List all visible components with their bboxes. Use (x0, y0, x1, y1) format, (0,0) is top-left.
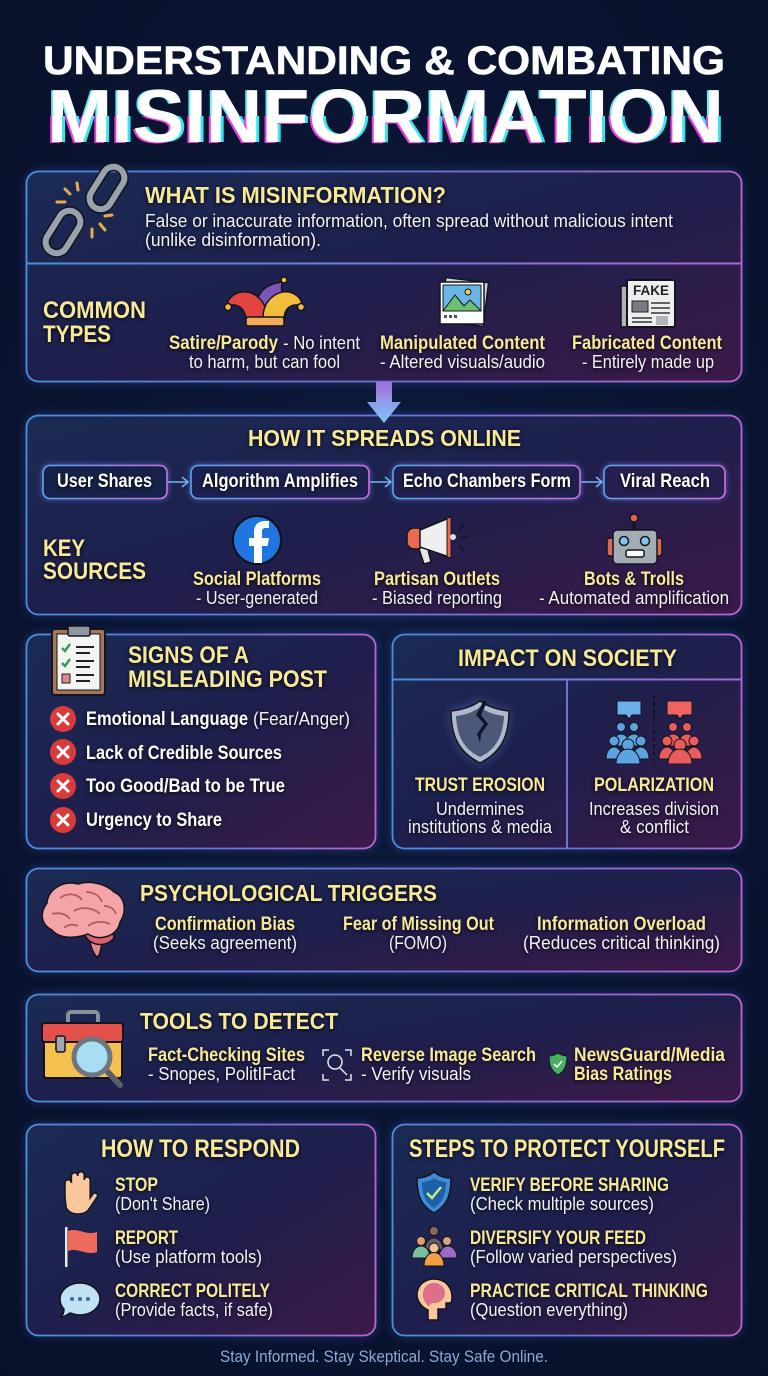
heading: HOW TO RESPOND (101, 1135, 300, 1163)
stop text: STOP (115, 1175, 158, 1196)
heading: IMPACT ON SOCIETY (458, 645, 677, 672)
trust erosion text (408, 775, 553, 837)
flow step: algorithm (191, 466, 369, 498)
key sources label: KEY (43, 535, 85, 562)
tool: newsguard: Bias Ratings (574, 1064, 672, 1085)
title line 2: glitch word: MISINFORMATION (48, 74, 724, 158)
trigger: confirmation bias: Confirmation Bias (155, 914, 295, 935)
sign: urgency (50, 807, 222, 833)
icon: cracked shield (451, 700, 509, 763)
manipulated text: - Altered visuals/audio (380, 351, 545, 372)
partisan text: Partisan Outlets (374, 569, 500, 590)
icon: facebook (233, 516, 281, 564)
tool: reverse image (361, 1045, 536, 1084)
diversify text (470, 1228, 677, 1267)
key sources label: SOURCES (43, 558, 146, 585)
tool: newsguard (574, 1045, 725, 1085)
icon: diverse group (412, 1226, 457, 1266)
bots text (539, 569, 729, 608)
key sources label (43, 535, 146, 585)
sign: too good: Too Good/Bad to be True (86, 776, 285, 797)
flow step: user shares: User Shares (57, 471, 152, 492)
panel: impact on society (392, 634, 742, 848)
social platforms text: Social Platforms (193, 569, 321, 590)
tool: newsguard: NewsGuard/Media (574, 1045, 725, 1066)
definition text: False or inaccurate information, often spread without malicious intent (145, 210, 673, 231)
correct text: (Provide facts, if safe) (115, 1299, 273, 1320)
diversify text: DIVERSIFY YOUR FEED (470, 1228, 646, 1249)
heading: TOOLS TO DETECT (140, 1008, 338, 1034)
practice text (470, 1281, 708, 1320)
polarization text (589, 775, 719, 837)
tool: fact checking (148, 1045, 305, 1084)
sign: urgency: Urgency to Share (86, 810, 222, 831)
flow step: echo chambers (393, 466, 580, 498)
title line 2: glitch word: MISINFORMATION (45, 75, 721, 159)
sign: too good (50, 773, 285, 799)
trigger: information overload: (Reduces critical thinking) (523, 932, 720, 953)
sign: lack of credible sources (50, 739, 282, 765)
panel: tools to detect (26, 994, 742, 1102)
icon: head with brain (417, 1279, 452, 1320)
satire text: Satire/Parody (169, 333, 278, 354)
heading: HOW IT SPREADS ONLINE (248, 425, 521, 451)
verify text: (Check multiple sources) (470, 1193, 654, 1214)
bots text: Bots & Trolls (584, 569, 684, 590)
trigger: information overload: Information Overload (537, 914, 706, 935)
manipulated text: Manipulated Content (380, 333, 546, 354)
report text: (Use platform tools) (115, 1246, 262, 1267)
diversify text: (Follow varied perspectives) (470, 1246, 677, 1267)
trigger: fomo: (FOMO) (389, 932, 447, 953)
flow step: viral reach (604, 466, 725, 498)
icon: photo stack (440, 277, 489, 326)
definition text: (unlike disinformation). (145, 229, 321, 250)
icon: blue shield (417, 1172, 451, 1213)
footer tagline: Stay Informed. Stay Skeptical. Stay Safe Online. (220, 1348, 548, 1366)
satire text: - No intent (283, 332, 360, 353)
sign: emotional language (50, 706, 350, 732)
verify text: VERIFY BEFORE SHARING (470, 1175, 669, 1196)
sign: emotional language: Emotional Language (86, 709, 248, 730)
icon: reverse image search (323, 1050, 351, 1080)
trigger: confirmation bias (153, 914, 297, 953)
practice text: PRACTICE CRITICAL THINKING (470, 1281, 708, 1302)
tool: reverse image: - Verify visuals (361, 1063, 471, 1084)
icon: toolbox with magnifier (42, 1012, 123, 1085)
common types label: COMMON (43, 297, 146, 324)
social platforms text: - User-generated (196, 587, 318, 608)
panel: how it spreads (26, 416, 742, 614)
common types label (43, 297, 146, 348)
heading: MISLEADING POST (128, 666, 327, 693)
common types label: TYPES (43, 321, 111, 348)
stop text (115, 1175, 210, 1214)
icon: red flag (65, 1227, 97, 1267)
flow step: algorithm: Algorithm Amplifies (202, 471, 358, 492)
polarization text: & conflict (620, 816, 689, 837)
panel: what is misinformation (26, 163, 742, 382)
practice text: (Question everything) (470, 1299, 628, 1320)
report text: REPORT (115, 1228, 178, 1249)
panel: how to respond (26, 1124, 376, 1336)
icon: fake newspaper: FAKE (633, 282, 669, 298)
icon: jester hat (224, 277, 304, 326)
fabricated text (572, 333, 723, 372)
trigger: information overload (523, 914, 720, 953)
panel: signs of a misleading post (26, 626, 376, 848)
tool: fact checking: Fact-Checking Sites (148, 1045, 305, 1066)
correct text (115, 1281, 273, 1320)
icon: fake newspaper (621, 280, 675, 327)
arrow: down between panels (367, 382, 401, 423)
trigger: fomo (343, 914, 495, 953)
flow step: user shares (43, 466, 167, 498)
arrow (168, 477, 188, 487)
fabricated text: Fabricated Content (572, 333, 723, 354)
trust erosion text: Undermines (436, 798, 524, 819)
tool: fact checking: - Snopes, PolitIFact (148, 1063, 295, 1084)
verify text (470, 1175, 669, 1214)
sign: emotional language: (Fear/Anger) (253, 708, 350, 729)
icon: brain (42, 882, 124, 957)
partisan text: - Biased reporting (372, 587, 502, 608)
arrow (581, 477, 602, 487)
report text (115, 1228, 262, 1267)
sign: lack of credible sources: Lack of Credible Sources (86, 743, 282, 764)
tool: reverse image: Reverse Image Search (361, 1045, 536, 1066)
icon: megaphone (407, 517, 468, 564)
flow step: echo chambers: Echo Chambers Form (403, 471, 571, 492)
satire text (169, 332, 360, 372)
title line 2: glitch word (50, 89, 721, 144)
satire text: to harm, but can fool (189, 351, 340, 372)
panel: psychological triggers (26, 868, 742, 972)
correct text: CORRECT POLITELY (115, 1281, 270, 1302)
polarization text: Increases division (589, 798, 719, 819)
flow step: viral reach: Viral Reach (620, 471, 710, 492)
stop text: (Don't Share) (115, 1193, 210, 1214)
trigger: confirmation bias: (Seeks agreement) (153, 932, 297, 953)
partisan text (372, 569, 502, 608)
polarization text: POLARIZATION (594, 775, 714, 796)
icon: broken chain (41, 163, 129, 257)
heading (128, 642, 327, 693)
title line 2: glitch word: MISINFORMATION (47, 74, 723, 158)
arrow (370, 477, 391, 487)
title (45, 46, 723, 144)
icon: speech bubble (60, 1283, 100, 1317)
trust erosion text: TRUST EROSION (415, 775, 545, 796)
icon: stop hand (65, 1172, 98, 1214)
manipulated text (380, 333, 546, 372)
icon: green shield (549, 1053, 567, 1075)
title line 1: UNDERSTANDING & COMBATING (43, 39, 725, 83)
icon: polarized groups (606, 695, 702, 766)
heading: WHAT IS MISINFORMATION? (145, 182, 446, 208)
definition text (145, 210, 673, 250)
social platforms text (193, 569, 321, 608)
icon: robot (607, 514, 662, 564)
heading: PSYCHOLOGICAL TRIGGERS (140, 880, 437, 906)
fabricated text: - Entirely made up (582, 351, 714, 372)
bots text: - Automated amplification (539, 587, 729, 608)
trust erosion text: institutions & media (408, 816, 553, 837)
title line 2: glitch word: MISINFORMATION (50, 74, 726, 158)
icon: clipboard (52, 626, 105, 695)
panel: steps to protect yourself (392, 1124, 742, 1336)
heading: SIGNS OF A (128, 642, 249, 669)
title line 2: glitch word: MISINFORMATION (46, 74, 722, 158)
trigger: fomo: Fear of Missing Out (343, 914, 495, 935)
